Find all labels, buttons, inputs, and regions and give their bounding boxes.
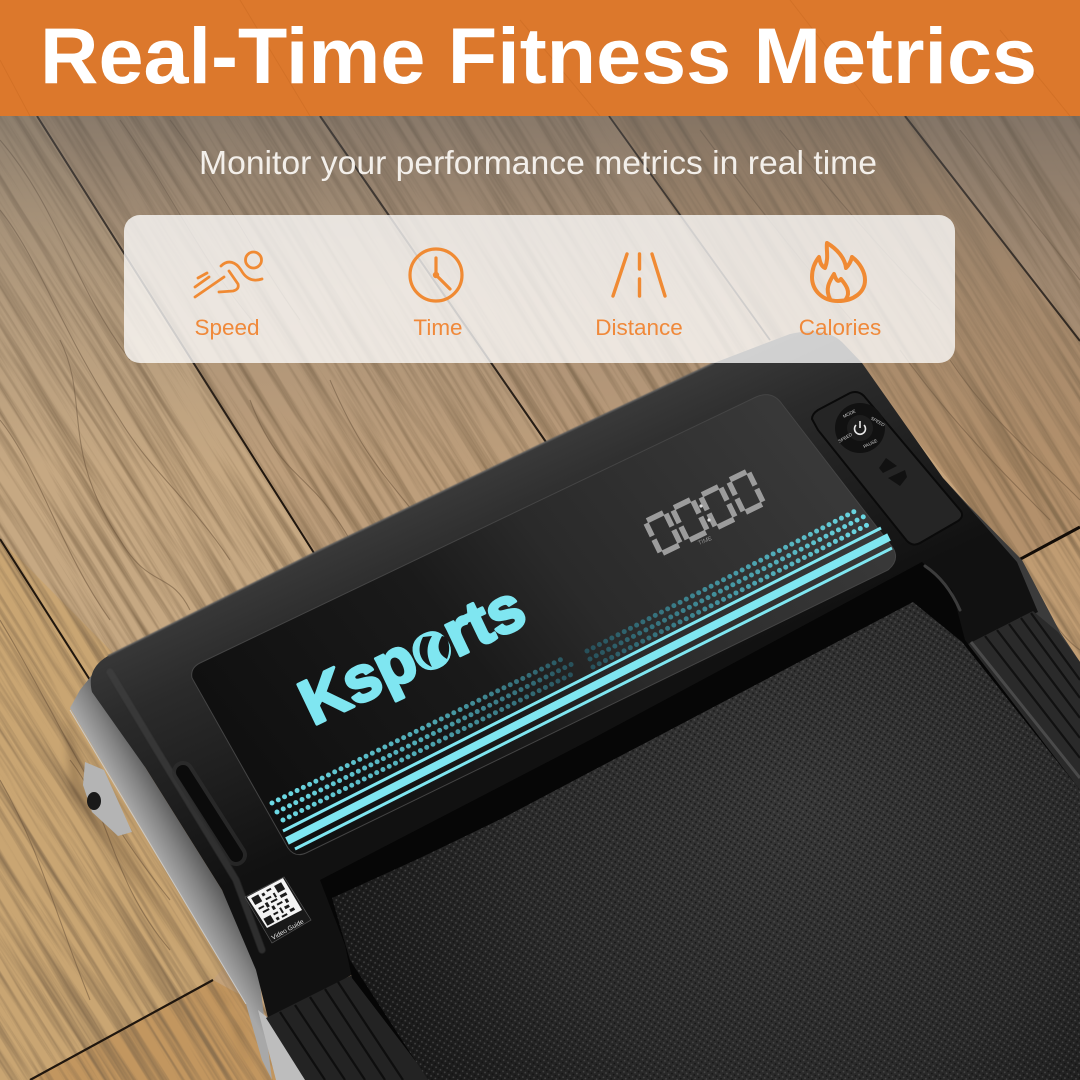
pad labels: SPEED: [870, 416, 886, 428]
metrics glass panel: [124, 215, 955, 363]
floor shadow: [66, 720, 250, 1070]
silver side frame: [70, 660, 272, 1080]
subtitle: Monitor your performance metrics in real time: [199, 144, 877, 181]
pad labels: MODE: [842, 408, 857, 419]
treadmill belt: [332, 602, 1080, 1080]
metric: distance: [595, 254, 683, 340]
front silver strip: [258, 1010, 312, 1080]
arm rounded corner highlight: [925, 566, 960, 610]
dot rows right: [587, 509, 871, 667]
incline down button: [888, 470, 907, 486]
right rail: [968, 611, 1080, 800]
label: Speed: [194, 315, 260, 340]
label: Distance: [595, 315, 683, 340]
metric: calories: [799, 243, 881, 340]
dot rows left: [272, 657, 576, 820]
icon: road: [613, 254, 665, 296]
label: Calories: [799, 315, 881, 340]
handle recess: [183, 772, 236, 855]
icon: clock: [410, 249, 462, 301]
rear wheel bracket: [83, 762, 132, 836]
logo leaf mark: [415, 633, 451, 669]
metric: speed: [194, 252, 262, 340]
treadmill: [66, 331, 1080, 1080]
label: Time: [413, 315, 463, 340]
top banner: [0, 0, 1080, 116]
icon: flame: [812, 243, 865, 301]
pad labels: SPEED: [837, 431, 854, 444]
control pad: [812, 392, 962, 545]
pad labels: [837, 408, 886, 449]
timer label: TIME: [698, 536, 713, 547]
pad labels: PAUSE: [863, 438, 878, 449]
QR sticker: Video Guide: [271, 918, 305, 942]
timer digits 00:00: [645, 471, 764, 554]
metric: time: [410, 249, 463, 340]
icon: power: [854, 421, 866, 434]
right frame shadow edge: [943, 478, 1080, 690]
icon: speed runner: [195, 252, 262, 297]
console display panel: [192, 395, 896, 855]
incline up button: [879, 458, 897, 473]
title: Real-Time Fitness Metrics: [40, 11, 1037, 100]
body top rim highlight: [108, 363, 714, 656]
cyan stripes: [283, 528, 892, 849]
logo: Ksports: Ksports: [288, 570, 536, 739]
QR sticker: [245, 877, 311, 943]
deep shadow opening under the console: [320, 562, 1080, 1080]
left rail: [266, 975, 445, 1080]
main black body: [91, 331, 1038, 1018]
body left shoulder highlight: [110, 672, 262, 950]
